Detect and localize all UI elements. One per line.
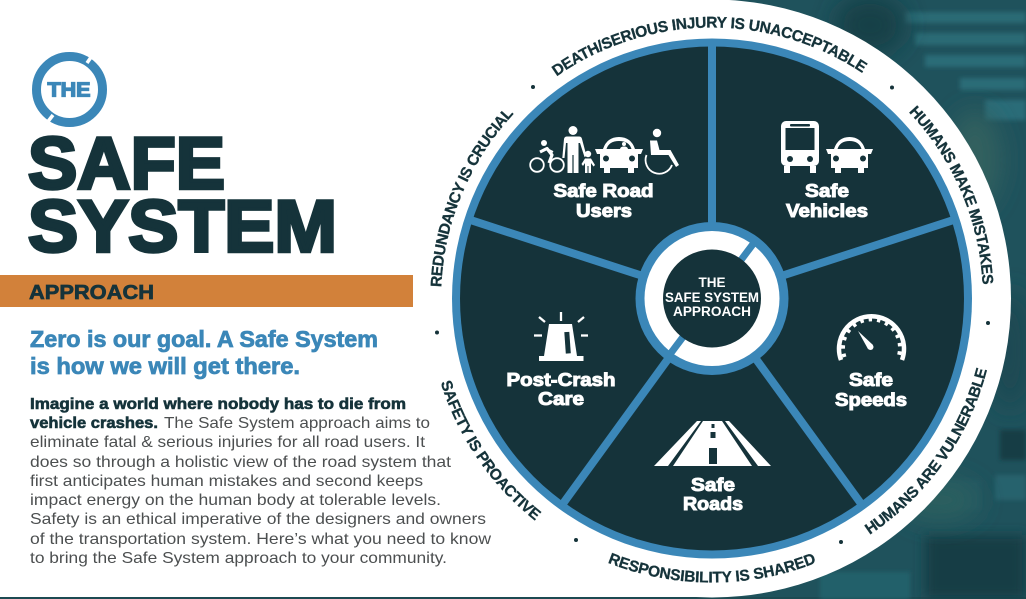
body paragraph	[30, 396, 491, 567]
body paragraph: Imagine a world where nobody has to die from	[30, 396, 406, 413]
body paragraph: to bring the Safe System approach to your community.	[30, 550, 447, 567]
body paragraph: impact energy on the human body at tolerable levels.	[30, 492, 441, 509]
title: SAFE SYSTEM: SYSTEM	[28, 186, 337, 268]
logo: THE ring: THE	[48, 80, 90, 102]
label: Safe Roads	[683, 474, 743, 514]
label: Safe Roads: Roads	[683, 493, 743, 514]
body paragraph: does so through a holistic view of the road system that	[30, 454, 452, 471]
centre hub	[636, 222, 788, 375]
heading: Zero is our goal: is how we will get there.	[30, 353, 300, 379]
orange APPROACH band: APPROACH	[29, 282, 154, 304]
label: Safe Vehicles	[786, 180, 868, 221]
heading: Zero is our goal	[30, 326, 378, 379]
icon: bus	[781, 121, 819, 173]
centre hub: APPROACH	[673, 304, 751, 319]
label: Safe Road Users	[554, 180, 654, 221]
centre hub: THE	[698, 275, 726, 290]
logo: THE ring	[36, 50, 102, 128]
heading: Zero is our goal: Zero is our goal. A Safe System	[30, 326, 378, 352]
label: Safe Roads: Safe	[691, 474, 735, 495]
icon: adult and child pedestrians	[562, 126, 595, 173]
title: SAFE SYSTEM	[28, 124, 337, 268]
label: Safe Speeds: Speeds	[835, 389, 907, 410]
ring captions around the wheel: REDUNDANCY IS CRUCIAL	[430, 110, 514, 286]
label: Safe Speeds: Safe	[849, 369, 893, 390]
body paragraph: The Safe System approach aims to	[164, 415, 430, 432]
body paragraph: Safety is an ethical imperative of the designers and owners	[30, 511, 486, 528]
label: Post-Crash Care: Post-Crash	[506, 369, 616, 390]
icon: speedometer	[839, 316, 904, 360]
body paragraph: of the transportation system. Here’s what you need to know	[30, 531, 491, 548]
ring captions around the wheel: HUMANS ARE VULNERABLE	[864, 368, 987, 534]
ring separator dots	[435, 85, 990, 544]
centre hub: SAFE SYSTEM	[665, 290, 759, 305]
ring captions around the wheel: HUMANS MAKE MISTAKES	[909, 105, 994, 284]
orange APPROACH band	[0, 275, 413, 307]
icon: car	[826, 137, 873, 173]
label: Safe Speeds	[835, 369, 907, 410]
ring captions around the wheel: SAFETY IS PROACTIVE	[442, 380, 542, 521]
label: Post-Crash Care	[506, 369, 616, 409]
ring captions around the wheel	[430, 16, 994, 583]
icon: road	[654, 421, 771, 466]
icon: car with driver	[595, 137, 643, 173]
label: Post-Crash Care: Care	[538, 388, 584, 409]
icon: emergency beacon	[534, 312, 588, 361]
wheel disc with five spokes	[452, 38, 972, 558]
label: Safe Road Users: Safe Road	[554, 180, 654, 201]
ring captions around the wheel: RESPONSIBILITY IS SHARED	[608, 552, 815, 583]
label: Safe Vehicles: Safe	[805, 180, 849, 201]
title: SAFE SYSTEM: SAFE	[28, 124, 225, 204]
ring captions around the wheel: DEATH/SERIOUS INJURY IS UNACCEPTABLE	[551, 16, 868, 76]
icon: wheelchair user	[646, 129, 679, 174]
body paragraph: eliminate fatal & serious injuries for all road users. It	[30, 434, 426, 451]
body paragraph: first anticipates human mistakes and second keeps	[30, 473, 423, 490]
label: Safe Vehicles: Vehicles	[786, 200, 868, 221]
body paragraph: vehicle crashes.	[30, 415, 158, 432]
icon: bicycle rider	[530, 140, 564, 172]
label: Safe Road Users: Users	[576, 200, 632, 221]
